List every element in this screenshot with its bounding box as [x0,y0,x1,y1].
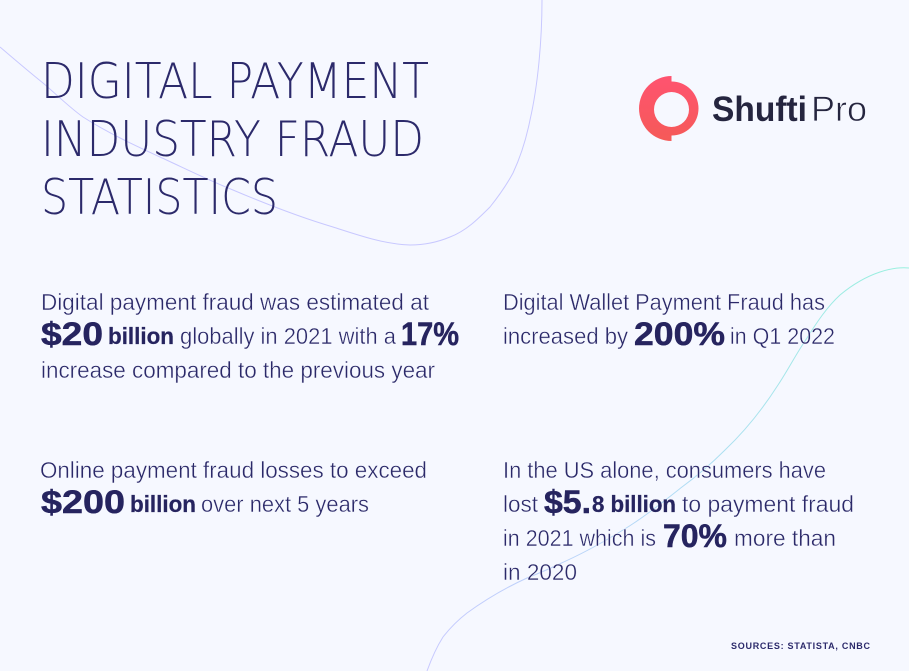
stat block: US consumer losses: to payment fraud [682,491,854,517]
title: DIGITAL PAYMENT [41,53,429,110]
stat block: US consumer losses [503,457,854,585]
stat block: digital wallet fraud: Digital Wallet Payment Fraud has [503,289,825,315]
stat block: US consumer losses: In the US alone, consumers have [503,457,826,483]
decorative curve: purple [0,0,542,245]
title: INDUSTRY FRAUD [41,111,424,168]
stat block: US consumer losses: 8 billion [592,491,676,517]
stat block: digital wallet fraud: in Q1 2022 [730,323,835,349]
stat block: global fraud estimate: 17% [401,316,459,352]
stat block: digital wallet fraud [503,289,835,352]
stat block: global fraud estimate: $20 [41,316,103,352]
stat block: digital wallet fraud: increased by [503,323,628,349]
stat block: digital wallet fraud: 200% [634,316,725,352]
stat block: global fraud estimate: billion [108,323,174,349]
logo wordmark: Pro [811,90,867,129]
title [41,53,429,226]
stat block: global fraud estimate: increase compared to the previous year [41,357,435,383]
stat block: online payment losses [40,457,427,520]
decorative curve: teal to blue [427,268,909,671]
stat block: online payment losses: over next 5 years [201,491,369,517]
sources note: SOURCES: STATISTA, CNBC [731,641,870,651]
stat block: global fraud estimate [41,289,459,383]
stat block: US consumer losses: $5. [544,484,591,520]
stat block: US consumer losses: more than [734,525,836,551]
stat block: US consumer losses: lost [503,491,538,517]
stat block: online payment losses: Online payment fraud losses to exceed [40,457,427,483]
stat block: US consumer losses: in 2021 which is [503,525,656,551]
title: STATISTICS [41,169,278,226]
stat block: online payment losses: $200 [41,484,125,520]
stat block: online payment losses: billion [130,491,196,517]
stat block: global fraud estimate: globally in 2021 with a [180,323,397,349]
stat block: US consumer losses: in 2020 [503,559,577,585]
logo wordmark [712,90,867,129]
icon: logo ring [639,76,698,141]
stat block: US consumer losses: 70% [663,518,727,554]
stat block: global fraud estimate: Digital payment fraud was estimated at [41,289,429,315]
logo wordmark: Shufti [712,90,807,129]
logo: Shufti Pro [639,76,867,141]
